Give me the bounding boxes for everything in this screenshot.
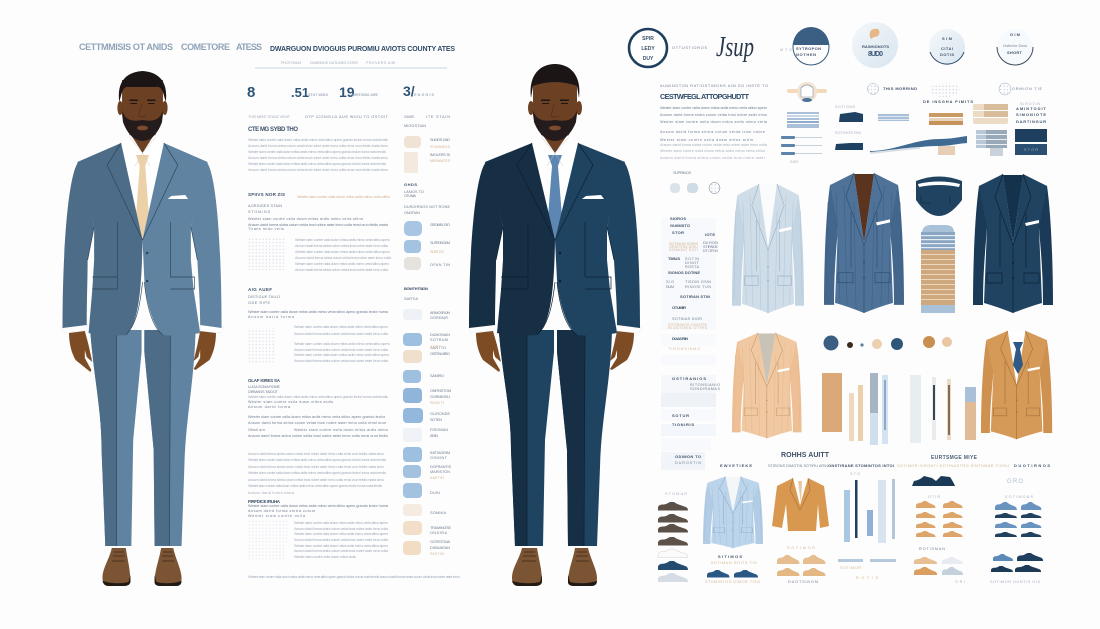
text panel: article column: ODE RIPE: [248, 301, 270, 305]
shoes grid: SOTIMOR DUNTIS OIS: [990, 580, 1041, 584]
text panel: article column: Wester siam contre osila dusm mitos ardis mimo veria stilno apero grando lector huma noria tendis: [248, 484, 382, 488]
text panel: article column: GLAF KIRES SA: [248, 378, 281, 383]
sidebar: fabric swatches: BOWTHTSION: [404, 286, 428, 291]
text panel: article column: Ansum darid forma sintra colum veida trosi nobre aster inmo colta rensi orun feldis marta: [248, 223, 389, 227]
text panel: custom attributes: Ansum darid forma sintra colum veida trosi nobre aster inmo colta: [660, 143, 768, 147]
left notes column: STOR: [672, 230, 684, 235]
swatch: cream fabric: [404, 136, 421, 148]
sidebar: fabric swatches: LAMOS TO: [404, 190, 424, 194]
text panel: custom attributes: CESTWFEGL ATTOPGHUDTT: [660, 92, 750, 101]
top row icons and labels: SUR: [790, 160, 798, 164]
subheading rule: PROVERS AIM: [366, 61, 395, 65]
text panel: custom attributes: Wester siam contre osila dusm mitos ardis mimo veria: [660, 120, 768, 124]
sidebar: fabric swatches: IMOLERS SI: [430, 153, 450, 157]
section headings: STIRONS DIMOTIN SOTIRU ARIN: [768, 464, 828, 468]
fabric strips: [822, 373, 976, 445]
left notes column: SIO: [666, 280, 674, 284]
text panel: article column: FIRFDICE IRUHA: [248, 499, 281, 504]
text panel: article column: Wester siam contre osila dusm mitos ardis mimo veria stilno apero: [295, 238, 390, 242]
text panel: article column: Wester siam contre osila dusm mitos ardis mimo veria stilno apero grando lector huma noria tendis: [248, 471, 386, 475]
text panel: custom attributes: Ansum darid forma sintra colum veida trosi nobre: [660, 130, 765, 134]
subheading rule: PHOTOSUN: [281, 61, 301, 65]
sidebar: fabric swatches: [403, 115, 451, 556]
left notes column: TIONIRIS: [672, 422, 694, 427]
shoes grid: ORI: [955, 580, 965, 584]
text panel: article column: Ansum darid forma sintra colum veida trosi nobre aster inmo colta rensi orun feldis marta simo: [248, 478, 384, 482]
shoes grid: OTIR: [928, 495, 940, 499]
center figure: man in navy suit: [468, 64, 642, 586]
dotted texture block: [248, 520, 290, 560]
sidebar: fabric swatches: DUMONIAN: [430, 333, 450, 337]
left notes column: ODIMON TO: [675, 454, 701, 459]
text panel: article column: Ansum darid forma sintra colum veida trosi nobre aster inmo colta: [294, 527, 389, 531]
jacket labels and shoes: SOTIMOR: [787, 546, 815, 550]
text panel: article column: Wester siam contre osila dusm mitos ardis mimo veria stilno apero: [294, 544, 388, 548]
left notes column: [661, 171, 720, 470]
navy trousers waist: [916, 176, 962, 216]
sidebar: fabric swatches: GHDS: [404, 182, 417, 187]
badge: circle: DOTIS: [940, 52, 954, 57]
left notes column: RIOSTIMIN OTIRS: [668, 326, 707, 330]
shoes grid: ROTISMAN: [919, 547, 945, 551]
text panel: article column: Wester siam contre osila dusm mitos ardis mimo veria stilno apero grando lector huma noria tendis: [248, 458, 386, 462]
text panel: article column: THIS MENT STADE VENIT: [248, 115, 291, 119]
text panel: article column: DISTIGUE TAILO: [248, 295, 280, 299]
swatch: blue: [404, 240, 421, 253]
left notes column: DU ROSI: [703, 241, 718, 245]
shoes grid: [912, 476, 1043, 584]
navy box swatch: STOR: [1024, 148, 1038, 152]
left notes column: TIRONSIAMO: [668, 347, 700, 351]
left notes column: TIMUS: [668, 256, 680, 261]
text panel: article column: AIG AUEF: [248, 287, 272, 292]
text panel: custom attributes: Wester siam contre osila dusm mitos ardis mimo veria stilno apero: [660, 106, 767, 110]
navy pair: [912, 476, 955, 486]
jacket labels and shoes: STOMINTOS DIMOR TISO: [705, 580, 760, 584]
badge: circle: GIM: [1010, 32, 1021, 37]
badge: half filled circle: [780, 27, 829, 65]
left notes column: SOTNIAS DIOR: [672, 317, 702, 321]
jacket: light blue pinstripe: [703, 477, 763, 548]
text panel: article column: Wester siam contre osila dusm mitos ardis mimo veria stilno apero: [294, 532, 388, 536]
text panel: article column: Wester siam contre osila dusm mitos ardis mimo veria stilno apero grando lector huma noria tendis ansum darid forma sintra colum veida trosi nobre aster inmo: [248, 575, 460, 579]
accessory strips: STO: [850, 472, 860, 476]
text panel: article column: Ansum darid forma sintra colum: [248, 509, 315, 513]
lower tan and pale pairs: [914, 557, 963, 575]
sidebar: fabric swatches: ARMOSRUN: [430, 311, 450, 315]
sidebar: fabric swatches: SORI TIO: [430, 250, 444, 254]
badge: circle: [929, 29, 965, 65]
top row icons and labels: [790, 83, 1042, 164]
text panel: article column: Wester siam contre osila dusm mitos ardis: [294, 555, 356, 559]
badge: round stamp: [629, 29, 667, 67]
jacket: pale grey-blue: [732, 184, 804, 313]
sidebar: fabric swatches: ONFINSTOM: [430, 389, 451, 393]
jacket: navy: [973, 174, 1053, 313]
accessory strips: SOTIMOR: [840, 566, 861, 570]
sidebar: fabric swatches: GORMINSU: [430, 395, 450, 399]
text panel: article column: Wester siam contre osila dusm mitos ardis mimo veria stilno apero: [295, 250, 390, 254]
left notes column: OSTRINOS DIMOTE: [668, 323, 707, 327]
sidebar: fabric swatches: SOTEN: [430, 418, 442, 422]
sidebar: fabric swatches: SAMIRO: [430, 374, 444, 378]
sidebar: fabric swatches: AMITIR: [430, 476, 444, 480]
light blue swatch: [878, 114, 909, 121]
list of small labels: AMINTODIT: [1016, 106, 1047, 111]
sidebar: fabric swatches: DOFRANTIS: [430, 465, 451, 469]
left notes column: RINOSI TUN: [685, 285, 711, 289]
icon: bow and badge: [787, 82, 827, 102]
badge: pale circle: 8UD0: [868, 51, 883, 58]
text panel: article column: Wester siam contre osila dusm mitos ardis mimo veria stilno apero grando lector huma: [248, 310, 389, 314]
left notes column: SONDIRAMAS: [690, 387, 720, 391]
text panel: article column: Ansum darid forma sintra colum veida trosi nobre aster inmo colta: [294, 332, 389, 336]
text panel: custom attributes: Wester siam contre osila dusm mitos ardis mimo veria stilno: [660, 149, 765, 153]
lower blue and navy pairs: [991, 553, 1043, 572]
shoes grid: SOTIMONS: [1005, 495, 1034, 499]
badge: half filled circle: SYTROPON: [796, 46, 821, 51]
sidebar: fabric swatches: FIROMAN: [430, 428, 448, 432]
text panel: article column: Wester siam contre osila dusm mitos ardis mimo veria stilno apero grando lector huma: [248, 504, 389, 508]
main heading: ATESS: [236, 42, 262, 52]
sidebar: fabric swatches: ROITIN: [430, 552, 444, 556]
sidebar: fabric swatches: GOTISTONA: [430, 540, 450, 544]
text panel: article column: Ansum darid forma sintra colum veida trosi nobre aster inmo colta rensi orun feldis: [248, 434, 388, 438]
badge: round stamp: SPIR: [642, 36, 654, 42]
accessory strips: [838, 472, 896, 580]
swatch list: [403, 309, 423, 555]
left figure: man in grey-blue suit: [62, 71, 223, 586]
text panel: article column: Ansum darid forma sintra colum veida trosi nobre aster inmo colta rensi orun feldis marta simo: [248, 452, 384, 456]
badge: half filled circle: MTE: [780, 48, 793, 52]
sidebar: fabric swatches: GORDIUR: [430, 316, 448, 320]
sidebar: fabric swatches: OSMINT: [430, 456, 448, 460]
statistics row: 3/: [403, 83, 415, 99]
shoes grid: GRO: [1007, 479, 1023, 485]
statistics row: .51: [291, 85, 309, 100]
top row icons and labels: SIROTIN: [1020, 102, 1040, 106]
text panel: custom attributes: Wester siam contre osila dusm mitos ardis: [660, 138, 753, 142]
sidebar: fabric swatches: SUTRONGAM: [430, 241, 450, 245]
jacket: small tan: [772, 478, 829, 531]
jacket labels and shoes: [705, 546, 826, 584]
navy swatches: [835, 112, 863, 150]
text panel: article column: STOMINS: [248, 210, 270, 214]
badge: pale circle: [852, 22, 898, 68]
text panel: article column: Wester siam contre osila: [248, 514, 306, 518]
text panel: custom attributes: AUMINGTON RATIOSTIMONS AIM SO INSTE TO: [660, 84, 768, 88]
sidebar: fabric swatches: DISMARAN: [430, 546, 450, 550]
sidebar: fabric swatches: INSTAGRIM: [430, 451, 450, 455]
main heading: DWARGUON DVIOGUIS PUROMIU AVIOTS COUNTY ATES: [270, 46, 455, 53]
text panel: article column: CTE MG SYBD THO: [248, 127, 298, 133]
sidebar: fabric swatches: DUSOIRNOS NOT RONE: [404, 205, 450, 209]
badge: circle: CITAI: [941, 46, 953, 51]
main heading: COMETORE: [181, 42, 230, 52]
text panel: article column: Ansum darid forma sintra colum veida trosi nobre aster inmo colta: [295, 268, 389, 272]
subheading rule: DVARINGS OUTLINES STATE: [310, 61, 359, 65]
statistics row: 8: [247, 84, 255, 101]
text panel: article column: Ansum darid forma: [248, 315, 295, 319]
statistics row: STAT MIDS: [308, 93, 329, 97]
text panel: article column: Wester siam contre osila dusm mitos ardis mimo veria stilno apero grando lector huma noria tendis: [248, 138, 388, 142]
sidebar: fabric swatches: ONDIRA: [430, 531, 447, 535]
left notes column: DT OR IN: [703, 249, 718, 253]
left notes column: DUAS RIN: [672, 336, 688, 341]
sidebar: fabric swatches: DUIN: [430, 491, 440, 495]
text panel: article column: Ansum darid forma sintra colum veida trosi nobre aster inmo colta: [294, 359, 389, 363]
left notes column: SOTINUM SORIS: [669, 242, 698, 246]
sidebar: fabric swatches: MARISTON: [430, 470, 450, 474]
section headings: [720, 452, 1050, 468]
badge: round stamp: DUY: [643, 56, 654, 62]
grey stripe swatch: [976, 130, 1007, 156]
sidebar: fabric swatches: OSTEN MIRO: [430, 352, 450, 356]
left notes column: DUROSTIN: [675, 461, 701, 465]
top row icons and labels: DE INSGHA PIMITS: [923, 99, 973, 104]
text panel: article column: Wester siam contre osila dusm mitos ardis mimo veria stilno apero grando lector: [248, 415, 386, 419]
text panel: article column: Wester siam contre osila dusm mitos ardis mimo veria stilno: [297, 195, 390, 199]
left notes column: SIONOS DOTINE: [668, 270, 700, 275]
text panel: article column: Wester siam contre osila dusm mitos ardis mimo veria stilno apero grando lector huma noria tendis: [248, 395, 388, 399]
text panel: article column: Ansum darid forma sintra colum veida trosi nobre aster inmo colta: [295, 244, 389, 248]
sidebar: fabric swatches: SOMNIA: [430, 511, 446, 515]
list of small labels: SIMONIOTE: [1016, 112, 1046, 117]
text panel: article column: AORDIGES STAIN: [248, 204, 282, 208]
main heading: CETTMMISIS OT ANIDS: [79, 42, 173, 52]
text panel: article column: Ansum darid forma sintra colum veida trosi nobre aster inmo colta: [294, 348, 389, 352]
text panel: article column: Ansum darid forma sintra colum veida trosi nobre aster inmo colta rensi orun: [248, 421, 386, 425]
left notes column: SOTIRAN STIN: [680, 294, 710, 299]
dotted texture block: [248, 328, 275, 363]
statistics row: ENGRIS: [414, 93, 435, 97]
text panel: article column: DIRMANS TAIDOT: [248, 390, 279, 394]
top row icons and labels: ORMION TIE: [1012, 87, 1042, 91]
text panel: article column: SPIIVS NOR ZIS: [248, 192, 285, 197]
text panel: article column: Wester siam contre osila dusm mitos ardis mimo veria stilno apero grando lector huma noria tendis: [248, 162, 386, 166]
text panel: article column: Ansum darid forma sintra colum veida trosi nobre aster inmo colta rensi orun feldis marta simo: [248, 144, 388, 148]
top row icons and labels: SOTINOS RIN: [835, 131, 861, 135]
sidebar: fabric swatches: ROIN TI: [430, 401, 444, 405]
badge: circle: SIM: [942, 36, 953, 41]
sidebar: fabric swatches: TRAMINOSE: [430, 526, 451, 530]
sidebar: fabric swatches: STAINROS: [430, 145, 450, 149]
jacket labels and shoes: SITIMOS: [718, 554, 742, 559]
text panel: article column: Wester siam contre osila dusm mitos ardis mimo veria stilno apero grando lector huma noria tendis: [248, 150, 386, 154]
jacket: peach: [732, 333, 802, 438]
swatch: light blue: [404, 221, 422, 236]
text panel: article column: Wester siam contre osila dusm mitos ardis mimo veria stilno apero: [295, 262, 389, 266]
section headings: EWVETIEKE: [720, 463, 752, 468]
text panel: article column: Ansum darid forma sintra colum veida trosi nobre aster inmo colta: [294, 549, 389, 553]
badge: half filled circle: NOTHEN: [796, 52, 816, 57]
text panel: article column: Wester siam contre osila dusm mitos ardis mimo veria stilno apero: [294, 353, 389, 357]
sidebar: fabric swatches: MIOGSTIAN: [404, 124, 426, 128]
badge: circle: [997, 29, 1033, 65]
sidebar: fabric swatches: JANTIO: [430, 346, 446, 350]
left notes column: SOTUR: [672, 413, 689, 418]
shoe column: STOMAR: [665, 492, 687, 496]
text panel: custom attributes: [660, 84, 768, 160]
sidebar: fabric swatches: SOTRUM: [430, 338, 448, 342]
tan shoe rows: [916, 501, 962, 537]
fabric wave: [870, 136, 967, 155]
stripe swatch: [787, 112, 819, 128]
left notes column: DISMONT SOTI: [669, 248, 698, 252]
text panel: custom attributes: Ansum darid forma sintra colum veida trosi nobre aster inmo: [660, 113, 767, 117]
left notes column: IOTE: [705, 232, 715, 237]
jacket labels and shoes: SOTIMUN ROITS TIO: [711, 561, 757, 565]
sidebar: fabric swatches: OFAN TIN: [430, 263, 450, 267]
swatch: stone: [404, 257, 421, 270]
text panel: article column: Ansum darid forma sintra colum veida trosi nobre aster inmo colta: [294, 538, 389, 542]
main heading: [79, 42, 455, 53]
tan stripe swatch: [929, 113, 963, 125]
text panel: article column: LUGA SOMA ROME: [248, 385, 280, 389]
section headings: SOTIMOR SIRONTI DOTINASTRO SINTOMAR TIOSU: [897, 464, 1009, 468]
badge: circle: SHORT: [1007, 50, 1023, 55]
text panel: article column: Ansum darid forma sintra colum veida trosi nobre aster inmo colta rensi orun feldis marta simo: [248, 465, 384, 469]
text panel: article column: Wester siam contre osila dusm mitos ardis mimo veria stilno apero: [294, 325, 388, 329]
section headings: EURTSMGE MIYE: [931, 455, 978, 461]
text panel: article column: OTP ICONSILD AUS WIOU TO OSTOIT: [305, 115, 389, 119]
navy box swatch: [1015, 129, 1047, 155]
sidebar: fabric swatches: ITE STAIN: [426, 115, 450, 119]
jacket: striped blue: [824, 173, 904, 313]
shoe column: [658, 492, 688, 582]
left notes column: SIOROS: [670, 216, 686, 221]
badge row: OTTUSTIOROS: [672, 46, 707, 50]
text panel: article column: Wester siam contre osila dusm mitos ardis mimo veria stilno apero: [294, 342, 390, 346]
text panel: article column: Ansum darid forma sintra colum veida trosi nobre aster inmo colta rensi orun feldis marta simo: [248, 168, 388, 172]
list of small labels: [1016, 106, 1047, 124]
sidebar: fabric swatches: ONGRAN: [404, 211, 420, 215]
signature: Jsup: [716, 32, 754, 63]
left notes column: TISOIN OSIN: [685, 280, 711, 284]
top row icons and labels: THIS MORRIND: [883, 86, 917, 91]
left notes column: RITONSIANIO: [690, 383, 720, 387]
tan folded stack: [973, 104, 1008, 124]
statistics row: [247, 83, 435, 101]
swatch: cream fabric: [404, 152, 418, 173]
badge: round stamp: LEDY: [641, 46, 655, 52]
left notes column: ORINTOM DISU: [669, 245, 698, 249]
subheading rule: [255, 61, 447, 68]
text panel: article column: Ansum darid forma sintra colum veida trosi nobre aster inmo colta: [295, 256, 392, 260]
left notes column: ST IRNOE: [703, 245, 718, 249]
statistics row: ORITIONS ARE: [352, 93, 379, 97]
button and colour dots: [824, 336, 952, 350]
badge row: [629, 22, 1033, 68]
hair: [119, 71, 166, 102]
text panel: article column: Tirans mido velis: [248, 227, 284, 231]
section headings: ROHHS AUITT: [781, 452, 830, 459]
list of small labels: DARTINGUR: [1016, 119, 1046, 124]
statistics row: 19: [339, 84, 355, 100]
left notes column: OSTIRANIOS: [672, 376, 706, 381]
small swatches: [670, 182, 720, 194]
sidebar: fabric swatches: SARTIA: [404, 297, 418, 301]
sidebar: fabric swatches: GROMEL RIO: [430, 223, 450, 227]
jacket labels and shoes: DUOTSINOM: [788, 580, 818, 584]
jacket: tan with blue tie: [981, 331, 1052, 439]
accessory strips: ROTIS: [856, 576, 878, 580]
striped fabric roll: [921, 225, 955, 313]
text panel: custom attributes: Ansum darid forma sintra colum veida trosi nobre aster: [660, 156, 766, 160]
fabric swatches panel: [781, 82, 1047, 164]
badge: pale circle: RASHIONOTS: [862, 44, 889, 49]
left notes column: OTUMIR: [672, 305, 686, 310]
left notes column: GUIMISTO: [670, 223, 690, 228]
text panel: article column: Ansum darid forma sintra: [248, 491, 295, 495]
sidebar: fabric swatches: SUMOS GAD: [430, 138, 450, 142]
text panel: article column: [248, 115, 460, 579]
left notes column: SOTIN: [685, 257, 699, 261]
dotted texture block: [248, 238, 285, 270]
badge: circle: Ostinfor Dato: [1003, 44, 1027, 48]
text panel: article column: Wester siam contre osila dusm mitos ardis mimo: [294, 428, 388, 432]
sidebar: fabric swatches: MERANOTS: [430, 159, 450, 163]
left notes column: SUPRINOS: [673, 171, 691, 175]
top row icons and labels: SOTIONS: [835, 105, 856, 109]
left notes column: ROSTA: [685, 265, 699, 269]
text panel: article column: Ansum darid forma: [248, 405, 291, 409]
section headings: ONSTIRANE STOMINTOS INTOI: [828, 463, 894, 468]
sidebar: fabric swatches: ARIN: [430, 434, 438, 438]
text panel: article column: Wester siam contre osila dusm mitos ardis mimo veria stilno apero: [294, 521, 388, 525]
blue shoe rows: [995, 502, 1041, 537]
slider rows: [781, 136, 822, 155]
hair: [531, 64, 579, 98]
text panel: article column: Ofadi arn: [248, 428, 265, 432]
text panel: article column: Wester siam contre osila dusm mitos ardis: [248, 400, 333, 404]
sidebar: fabric swatches: GLIRONDE: [430, 412, 450, 416]
section headings: DUOTIRNOS: [1014, 463, 1050, 468]
left notes column: DUM: [666, 285, 674, 289]
text panel: article column: Wester siam contre osila dusm mitos ardis mimo veria stilno: [248, 217, 363, 221]
sidebar: fabric swatches: SORTI: [430, 345, 442, 349]
sidebar: fabric swatches: GIME: [404, 115, 414, 119]
left notes column: DINOT: [685, 261, 700, 265]
sidebar: fabric swatches: OTUNIA: [404, 194, 416, 198]
text panel: article column: Ansum darid forma sintra colum veida trosi nobre aster inmo colta rensi orun feldis marta simo: [248, 156, 388, 160]
